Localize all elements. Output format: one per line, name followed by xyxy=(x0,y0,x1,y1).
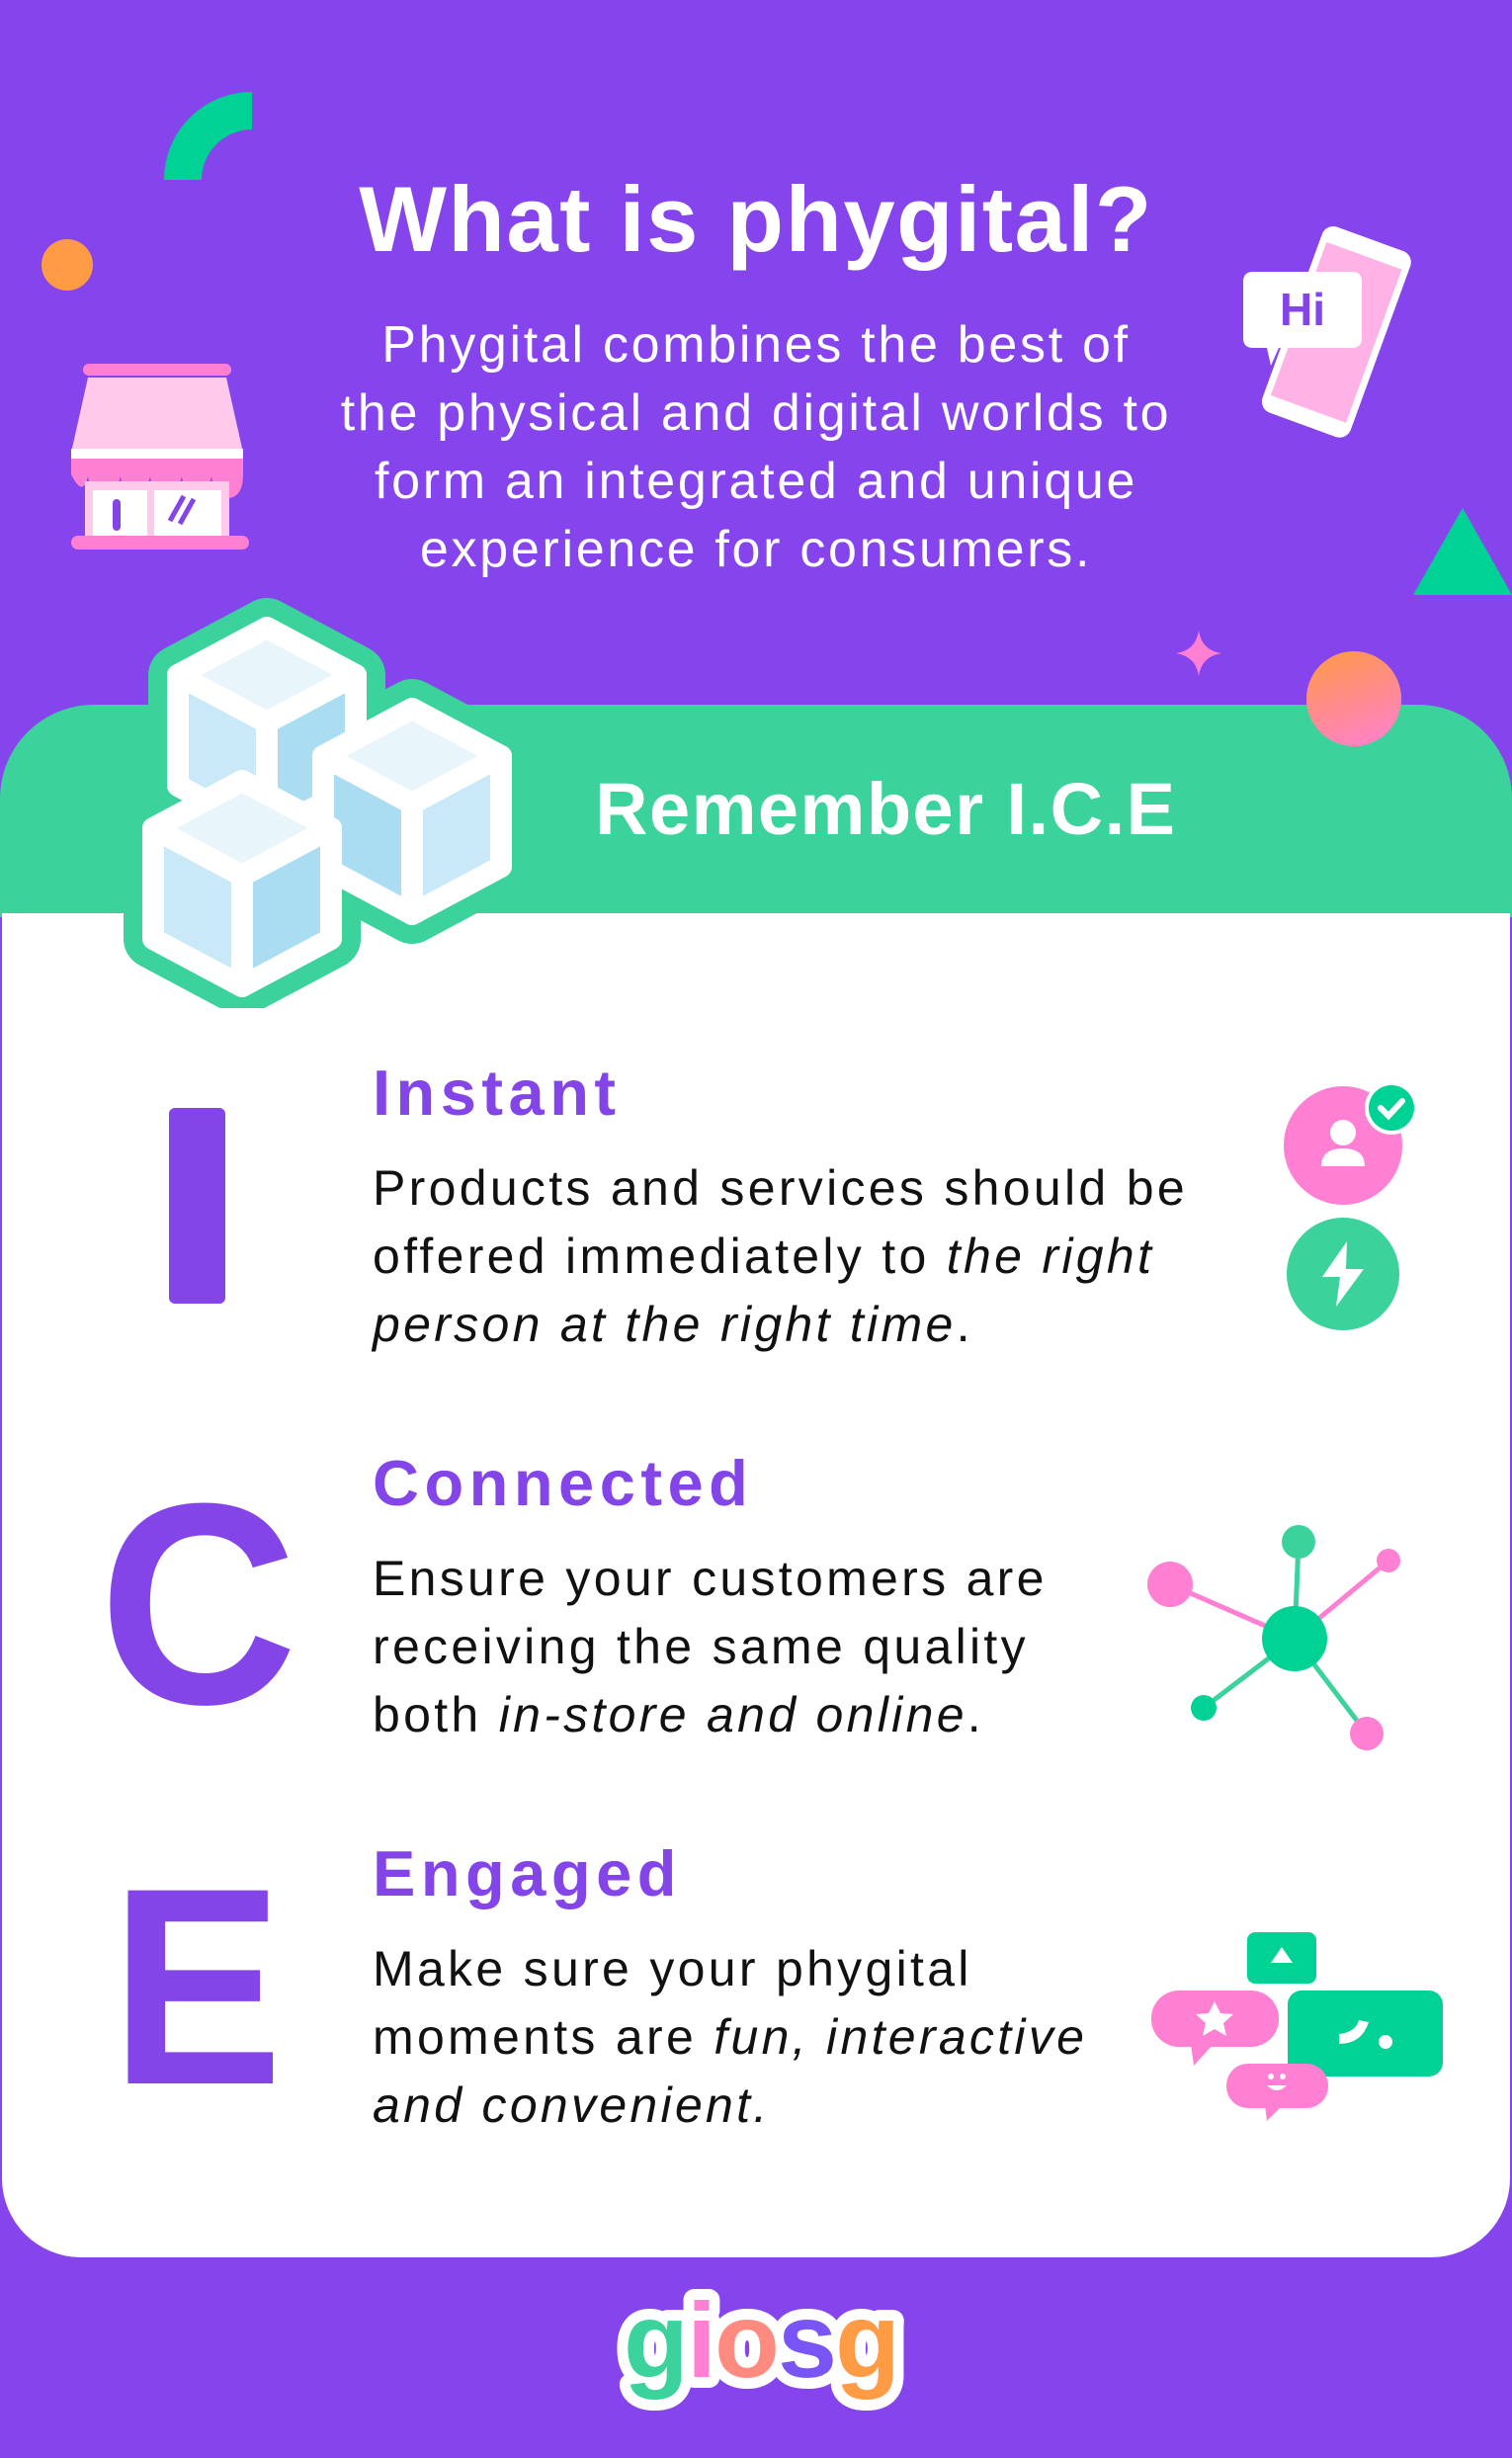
body: Instant: person at the right time. xyxy=(373,1297,973,1352)
decoration: gradient circle xyxy=(1306,651,1401,746)
icon: chat bubbles xyxy=(1151,1932,1443,2121)
icon: phone with Hi bubble: Hi xyxy=(1280,284,1325,335)
decoration: green triangle xyxy=(1413,508,1512,595)
body: Engaged: and convenient. xyxy=(373,2077,771,2133)
body: Instant: Products and services should be xyxy=(373,1160,1188,1216)
section: Instant xyxy=(372,1057,1188,1352)
body: Instant: offered immediately to the right xyxy=(373,1229,1154,1284)
logo: giosg: giosg xyxy=(624,2283,898,2400)
body: Connected: both in-store and online. xyxy=(373,1687,984,1742)
icon: network xyxy=(1147,1525,1400,1750)
icon: ice cubes xyxy=(124,598,512,1008)
subtitle: experience for consumers. xyxy=(420,521,1092,578)
subtitle: the physical and digital worlds to xyxy=(341,384,1171,442)
title: What is phygital? xyxy=(359,167,1153,271)
heading: Instant: Instant xyxy=(373,1057,622,1129)
body: Connected: Ensure your customers are xyxy=(373,1551,1048,1606)
letter C: C xyxy=(99,1444,297,1764)
icon: phone with Hi bubble xyxy=(1243,226,1411,438)
decoration: orange dot xyxy=(42,239,93,291)
body: Engaged xyxy=(373,1941,1087,2133)
heading: Connected: Connected xyxy=(373,1447,753,1519)
decoration: green arc xyxy=(164,92,252,180)
body: Connected xyxy=(373,1551,1048,1742)
logo: giosg: giosg xyxy=(624,2283,898,2400)
body: Engaged: Make sure your phygital xyxy=(373,1941,972,1996)
subtitle: Phygital combines the best of xyxy=(381,316,1131,374)
subtitle xyxy=(341,316,1171,578)
icon: store xyxy=(71,364,249,550)
section: Connected xyxy=(373,1447,1048,1742)
letter I xyxy=(169,1108,225,1304)
banner heading: Remember I.C.E xyxy=(595,768,1177,850)
body: Instant xyxy=(372,1160,1188,1352)
green banner xyxy=(0,705,1512,917)
letter E: E xyxy=(111,1830,283,2144)
body: Engaged: moments are fun, interactive xyxy=(373,2009,1087,2065)
decoration: pink sparkle xyxy=(1176,631,1221,676)
icon: person and lightning xyxy=(1284,1085,1414,1330)
body: Connected: receiving the same quality xyxy=(373,1619,1029,1674)
white card xyxy=(2,913,1510,2257)
subtitle: form an integrated and unique xyxy=(375,453,1137,510)
heading: Engaged: Engaged xyxy=(373,1837,682,1909)
section: Engaged xyxy=(373,1837,1087,2133)
